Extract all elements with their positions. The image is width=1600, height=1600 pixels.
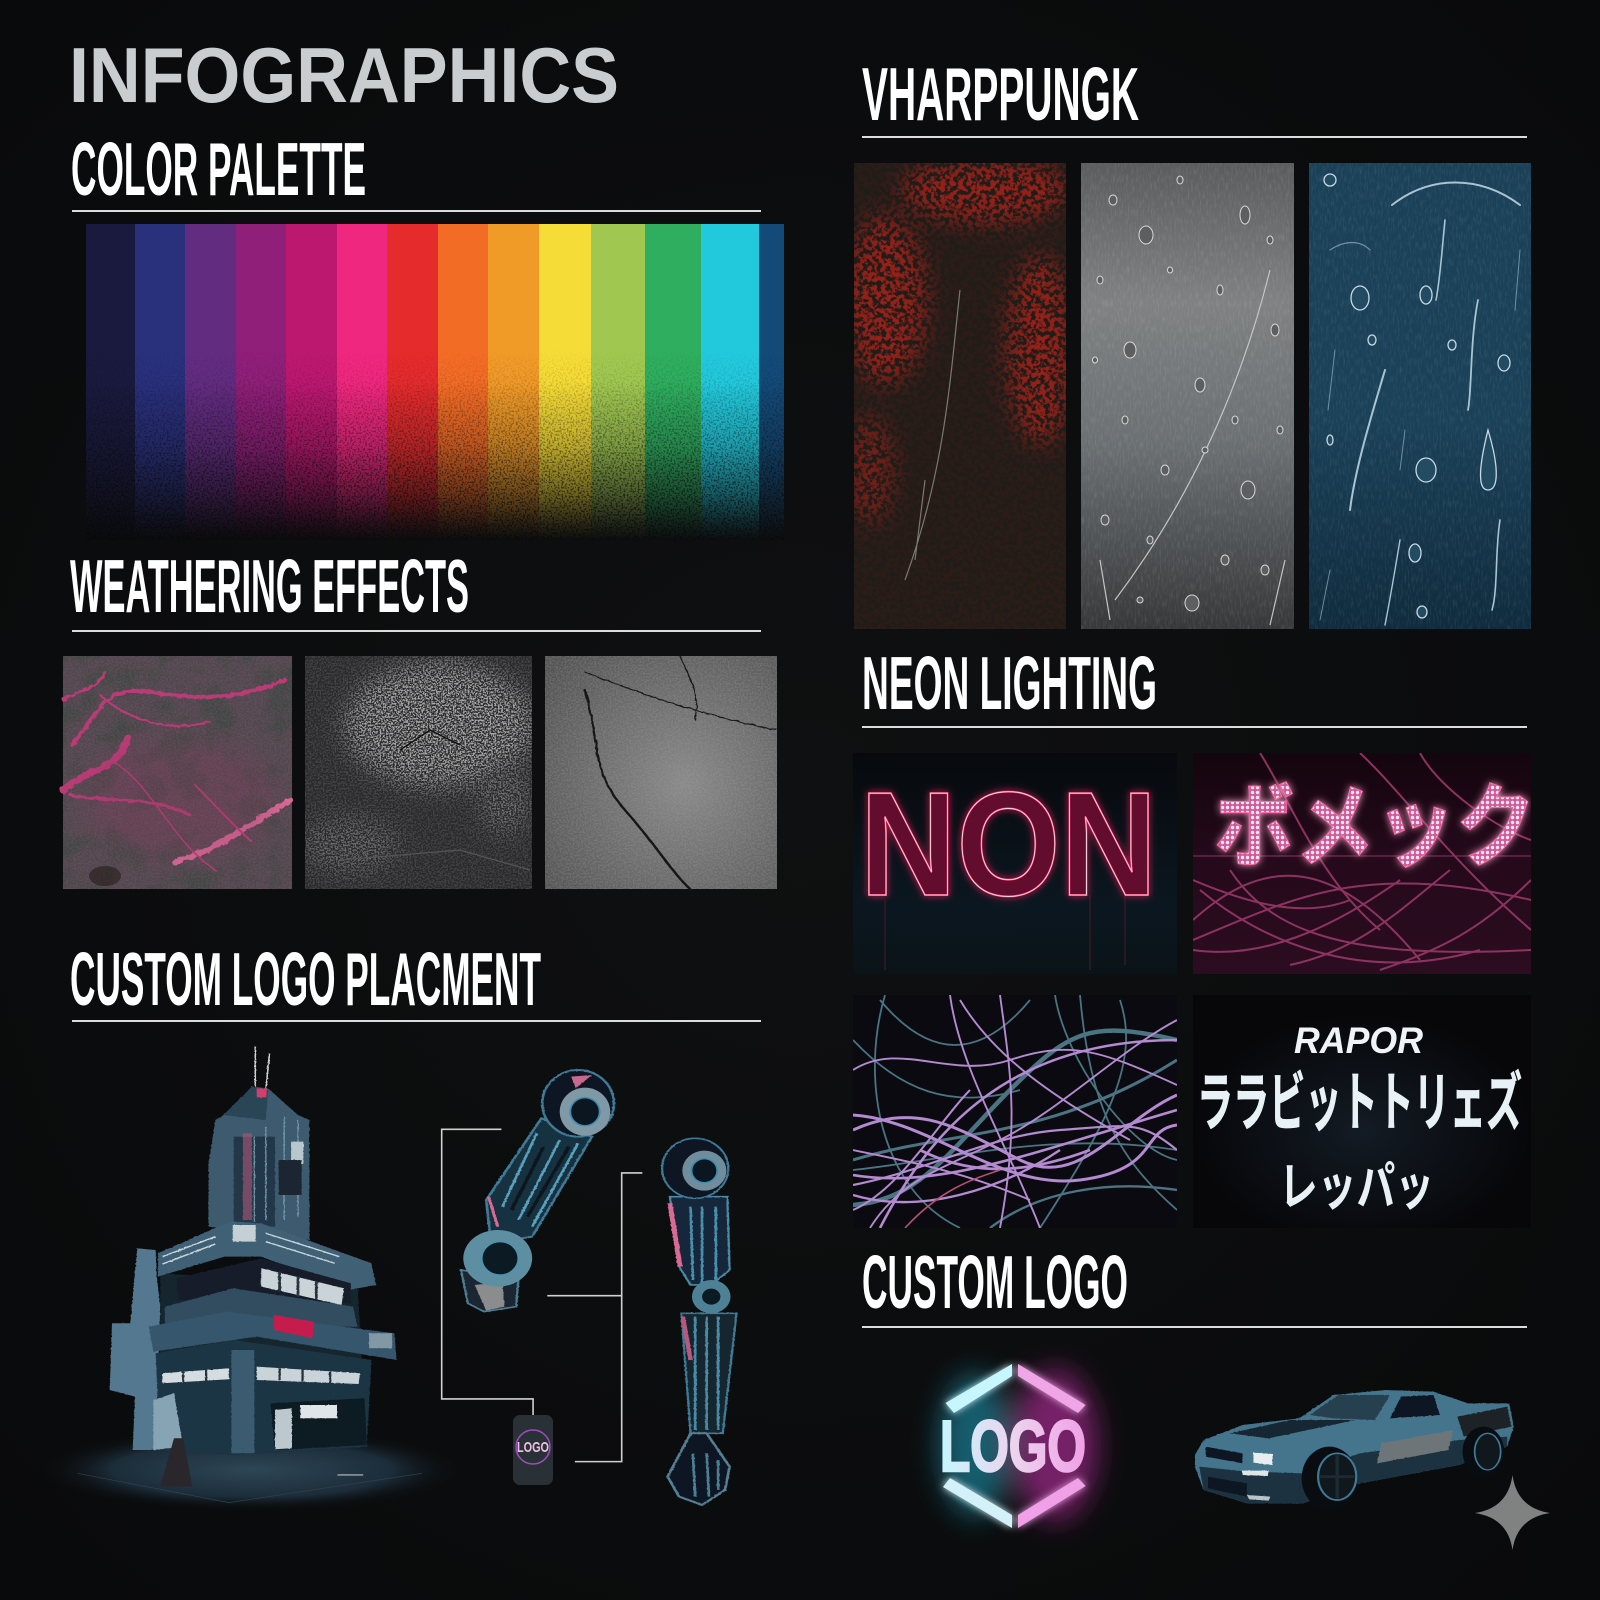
panel: NON neon sign: NON (860, 762, 1157, 927)
heading: vharppungk: VHARPPUNGK (862, 52, 1139, 136)
wearable device with logo (513, 1415, 553, 1485)
red sign (274, 1315, 314, 1338)
cybernetic arm: vertical (662, 1138, 737, 1505)
ground floor (156, 1340, 371, 1455)
front grille (1206, 1447, 1247, 1497)
panel: NON neon sign: NON (860, 762, 1157, 927)
heading: neon lighting: NEON LIGHTING (862, 641, 1157, 725)
storefront (270, 1398, 367, 1450)
panel: tangled neon wires (853, 995, 1177, 1228)
heading: custom logo placement: CUSTOM LOGO PLACMENT (70, 937, 541, 1021)
headlight (1253, 1453, 1273, 1465)
heading: weathering effects: WEATHERING EFFECTS (70, 544, 469, 628)
lower body shadow (1199, 1437, 1507, 1503)
heading: custom logo: CUSTOM LOGO (862, 1240, 1128, 1324)
panel: cracked concrete texture (545, 656, 777, 889)
building illustration (36, 1047, 468, 1512)
logo wordmark: LOGO (940, 1407, 1086, 1487)
logo glow (939, 1369, 1097, 1521)
panel: pink corrosion texture (63, 656, 292, 889)
car illustration (1195, 1390, 1514, 1510)
side window (1390, 1395, 1440, 1418)
car body (1195, 1390, 1514, 1503)
panel: Japanese neon sign with wires: ボメック (1214, 777, 1536, 879)
heading: color palette: COLOR PALETTE (71, 127, 366, 211)
windshield (1310, 1395, 1390, 1420)
tower (208, 1087, 309, 1240)
upper balcony (158, 1222, 376, 1290)
front wheel (1302, 1447, 1357, 1510)
cybernetic arm: diagonal (461, 1070, 614, 1312)
wearable device with logo: LOGO (517, 1439, 549, 1456)
panel: Japanese neon sign with wires (1193, 753, 1536, 974)
panel: blue metal with droplets (1309, 163, 1531, 629)
middle floor (176, 1258, 351, 1303)
panel: rust texture (854, 163, 1066, 629)
panel: dark grunge texture (305, 656, 532, 889)
panel: Japanese typography: RAPOR (1294, 1020, 1423, 1061)
rear damage (1457, 1407, 1512, 1437)
sparkle watermark (1475, 1475, 1550, 1550)
panel: Japanese typography (1193, 995, 1531, 1228)
hood vents (1230, 1420, 1355, 1438)
left column (110, 1248, 160, 1450)
connector lines (442, 1129, 642, 1462)
road edge (78, 1473, 422, 1503)
neon hexagon logo (939, 1364, 1097, 1528)
antennas (255, 1047, 269, 1090)
panel: gray metal with droplets (1081, 163, 1294, 629)
panel: Japanese typography: レッパッ (1279, 1159, 1434, 1217)
rear wheel (1463, 1427, 1504, 1477)
door panel (1377, 1430, 1453, 1463)
building core (160, 1273, 367, 1455)
traffic cones (160, 1438, 192, 1487)
hexagon segments (943, 1364, 1086, 1528)
color palette stripes (86, 224, 784, 540)
title: INFOGRAPHICS (69, 31, 619, 119)
lower balcony (149, 1312, 397, 1360)
ground (36, 1428, 468, 1512)
